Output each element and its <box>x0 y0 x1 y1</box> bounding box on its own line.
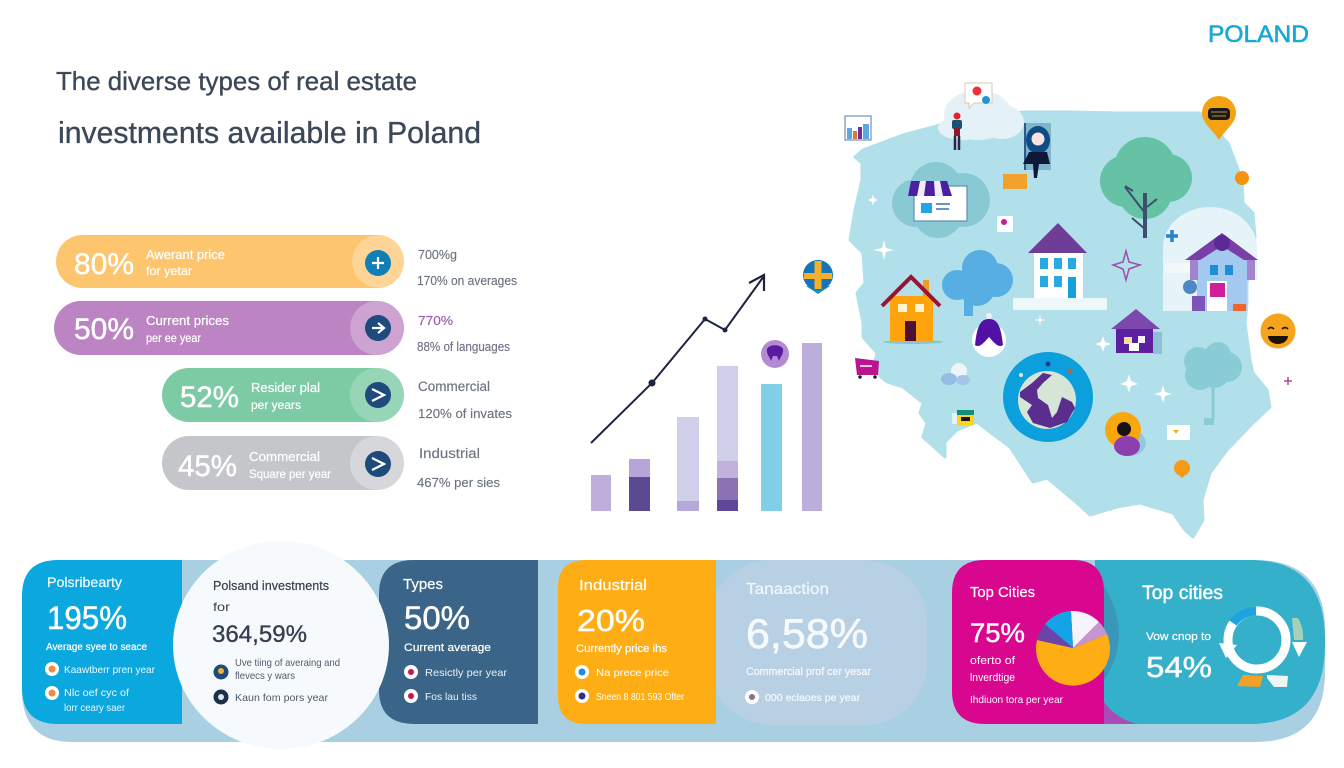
panel: Polsribearty: Average syee to seace <box>46 641 147 653</box>
panel: Industrial: Industrial <box>579 577 647 594</box>
pill side note: 45% row <box>417 446 500 490</box>
pill side note: 45% row: Industrial <box>419 446 480 461</box>
band background <box>22 560 1325 742</box>
pill row: 45%: 45% <box>178 450 237 483</box>
purple house in dome <box>1163 207 1258 311</box>
green tree <box>1100 137 1192 238</box>
title: The diverse types of real estate <box>56 66 417 96</box>
bottom stat band <box>22 541 1325 749</box>
small cloud <box>941 363 970 385</box>
purple compass star <box>1113 251 1140 280</box>
orange house <box>882 277 943 344</box>
panel: Polsribearty: lorr ceary saer <box>64 702 125 714</box>
panel: Types: 50% <box>404 600 470 636</box>
orange dot <box>1235 171 1249 185</box>
icon: globe pin <box>803 260 833 294</box>
panel: Transaction: Tanaaction <box>746 581 829 598</box>
pill row: 45%: Square per year <box>249 467 331 481</box>
globe badge <box>1003 352 1093 442</box>
panel: Polsand investments circle: Kaun fom pors year <box>235 692 328 704</box>
icon: blue plus <box>1166 230 1178 242</box>
panel: Top Cities magenta: oferto of <box>970 655 1016 667</box>
pill side note: 52% row: Commercial <box>418 379 490 394</box>
panel: Top Cities magenta: lnverdtige <box>970 672 1015 684</box>
panel: Top cities teal: 54% <box>1146 652 1212 684</box>
donut chart with arrows <box>1219 611 1307 687</box>
pill side note: 45% row: 467% per sies <box>417 476 500 490</box>
pill side note: 80% row <box>417 247 517 288</box>
panel: Top Cities magenta <box>952 560 1104 724</box>
panel: Transaction: Commercial prof cer yesar <box>746 666 871 678</box>
pill side note: 80% row: 700%g <box>418 247 457 262</box>
panel: Polsribearty <box>22 560 182 724</box>
panel: Types: Fos lau tiss <box>425 691 477 703</box>
small purple house <box>1111 309 1162 354</box>
panel: Transaction: 6,58% <box>746 610 868 657</box>
pill row: 50%: 50% <box>74 313 134 346</box>
figure on white circle <box>972 313 1006 357</box>
pill row: 80% <box>56 235 404 288</box>
panel: Types: Resictly per year <box>425 667 508 679</box>
panel: Industrial: Sneen 8 801 593 Ofter <box>596 691 684 703</box>
pill row: 45% <box>162 436 404 490</box>
panel: Top cities teal: Vow cnop to <box>1146 631 1211 643</box>
panel: Polsand investments circle: 364,59% <box>212 621 307 648</box>
figure in hooded portrait <box>1023 123 1051 178</box>
icon: purple badge <box>761 340 789 368</box>
white house with purple roof <box>1013 223 1107 310</box>
pill side note: 50% row <box>417 313 510 354</box>
panel: Top cities teal <box>1073 560 1325 724</box>
bar chart with trend arrow <box>591 275 822 511</box>
panel: Top Cities magenta: Ihdiuon tora per year <box>970 694 1063 706</box>
figure on orange circle <box>1105 412 1146 456</box>
title: investments available in Poland <box>58 115 481 150</box>
panel: Types: Types <box>403 576 443 593</box>
blue tree <box>942 250 1013 316</box>
pill row: 52% <box>162 368 404 422</box>
panel: Transaction <box>709 560 927 725</box>
trend arrow <box>591 275 764 443</box>
pill row: 52%: Resider plal <box>251 381 320 395</box>
panel: Polsribearty: Nlc oef cyc of <box>64 687 129 699</box>
pill row: 50% <box>54 301 404 355</box>
panel: Industrial <box>558 560 716 724</box>
pill row: 50%: per ee year <box>146 331 201 345</box>
pill side note: 80% row: 170% on averages <box>417 274 517 288</box>
teal tree <box>1184 342 1242 425</box>
pill side note: 50% row: 770% <box>418 313 453 328</box>
pill side note: 50% row: 88% of languages <box>417 340 510 354</box>
map landmass <box>850 112 1270 537</box>
pill row: 52%: per years <box>251 398 301 412</box>
panel: Top Cities magenta: 75% <box>970 618 1025 648</box>
pill row: 52%: 52% <box>180 381 239 414</box>
store on cloud <box>892 162 990 238</box>
icon: small magenta plus <box>1284 377 1292 385</box>
orange balloon <box>1174 460 1190 478</box>
pill side note: 52% row <box>418 379 512 421</box>
pin: orange marker <box>1202 96 1236 140</box>
panel: Top cities teal: Top cities <box>1142 583 1223 604</box>
panel: Industrial: Currently price ihs <box>576 643 668 655</box>
panel: Top Cities magenta: Top Cities <box>970 584 1035 601</box>
pill row: 50%: Current prices <box>146 314 229 328</box>
panel: Industrial: Na prece price <box>596 667 669 679</box>
panel: Polsand investments circle: for <box>213 600 230 614</box>
pie chart <box>1036 611 1110 686</box>
pill row: 45%: Commercial <box>249 450 320 464</box>
panel: Types <box>379 560 538 724</box>
icon: magenta cart <box>855 358 879 379</box>
panel: Polsribearty: Polsribearty <box>47 574 122 590</box>
panel: Polsand investments circle <box>173 541 389 749</box>
icon: small white card <box>997 216 1013 232</box>
pill row: 80%: for yetar <box>146 264 192 278</box>
panel: Polsribearty: Kaawtberr pren year <box>64 664 155 676</box>
panel: Types: Current average <box>404 642 491 654</box>
icon: white note <box>1167 425 1190 440</box>
brand label: POLAND: POLAND <box>1208 21 1309 48</box>
panel: Polsand investments circle: Uve tiing of averaing and <box>235 657 340 669</box>
map of Poland <box>845 83 1270 537</box>
sparkles <box>868 194 1172 403</box>
panel: Industrial: 20% <box>577 603 645 638</box>
panel: Polsand investments circle: Polsand investments <box>213 578 329 593</box>
icon: yellow card <box>952 410 974 425</box>
icon: smiley face <box>1260 314 1296 348</box>
pill row: 80%: 80% <box>74 248 134 281</box>
cloud with person and speech bubble <box>938 83 1024 150</box>
icon: chart card <box>845 116 871 140</box>
title <box>56 66 481 150</box>
pill side note: 52% row: 120% of invates <box>418 407 512 421</box>
panel: Transaction: 000 eclaoes pe year <box>765 692 860 704</box>
icon: orange briefcase <box>1003 174 1027 189</box>
pill row: 80%: Awerant price <box>146 248 225 262</box>
panel: Polsribearty: 195% <box>47 600 127 636</box>
panel: Polsand investments circle: flevecs y wars <box>235 670 295 682</box>
